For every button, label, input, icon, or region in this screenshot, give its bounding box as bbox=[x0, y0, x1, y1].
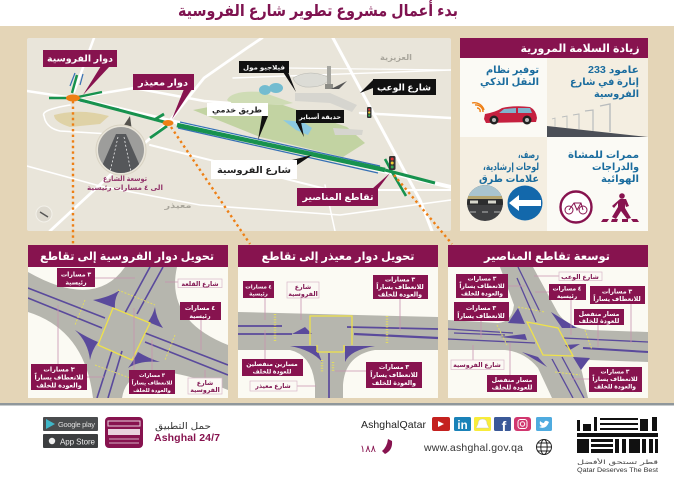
cell: pedestrian and cycle bridges bbox=[560, 150, 639, 222]
callout: 3 lanes left and U-turn: للانعطاف يساراً bbox=[592, 375, 638, 383]
label: Aspire park: حديقة أسباير bbox=[298, 113, 341, 121]
panel: convert Furousiya roundabout bbox=[28, 245, 228, 398]
callout: 3 lanes left and U-turn: ٣ مسارات bbox=[601, 368, 630, 376]
label: Villaggio Mall bbox=[239, 61, 296, 92]
callout: 4 main lanes: رئيسية bbox=[249, 292, 268, 298]
callout: 4 main lanes: رئيسية bbox=[189, 313, 211, 320]
cell: lighting poles: الفروسية bbox=[594, 89, 639, 100]
callout: 3 lanes left and U-turn: ٣ مسارات bbox=[139, 373, 166, 379]
callout: separate U-turn lane: مسار منفصل bbox=[579, 311, 620, 318]
badge: Google Play: Google play bbox=[58, 420, 95, 429]
label: service road bbox=[207, 103, 268, 140]
inset: widening bbox=[87, 116, 163, 192]
callout: 4 main lanes: ٤ مسارات bbox=[245, 284, 272, 290]
icon: wifi bbox=[472, 103, 484, 112]
callout: Qalaa street: شارع القلعة bbox=[181, 281, 219, 288]
cell: pavement, signs, markings: لوحات إرشادية، bbox=[483, 162, 539, 173]
download app text: Ashghal 24/7 bbox=[154, 432, 220, 444]
cell: pavement, signs, markings: رصف، bbox=[518, 150, 539, 161]
heading: تحويل دوار الفروسية إلى تقاطع bbox=[40, 251, 214, 264]
callout: 3 main lanes bbox=[57, 268, 95, 287]
callout: Furousiya street bbox=[188, 378, 222, 394]
icon: globe bbox=[536, 440, 552, 454]
callout: 4 main lanes: ٤ مسارات bbox=[553, 286, 582, 292]
leader lines bbox=[473, 276, 631, 379]
heading: توسعة تقاطع المناصير bbox=[483, 251, 610, 264]
label: Al Furousiya street bbox=[211, 155, 312, 179]
callout: separate U-turn lane: للعودة للخلف bbox=[579, 318, 619, 325]
badge: Google Play bbox=[43, 417, 98, 431]
callout: 3 lanes left and U-turn: للانعطاف يساراً bbox=[370, 370, 418, 379]
download app text: حمل التطبيق bbox=[155, 421, 211, 431]
label: service road: طريق خدمي bbox=[212, 106, 262, 114]
callout: 4 main lanes bbox=[243, 281, 274, 298]
callout: separate U-turn lane bbox=[574, 309, 624, 325]
callout: Furousiya street: شارع bbox=[295, 284, 311, 291]
icon: phone bbox=[382, 439, 392, 454]
callout: 3 lanes left and U-turn: ٣ مسارات bbox=[385, 276, 415, 284]
callout: Furousiya street: الفروسية bbox=[288, 291, 318, 298]
callout: 4 main lanes bbox=[549, 284, 586, 300]
heading: تحويل دوار معيذر إلى تقاطع bbox=[262, 251, 414, 264]
callout: separate U-turn lane bbox=[487, 375, 537, 392]
label: Villaggio Mall: فيلاجيو مول bbox=[243, 64, 285, 72]
cell: smart transport: توفير نظام bbox=[486, 65, 539, 76]
label: Aspire park bbox=[296, 110, 344, 137]
cell: smart transport: النقل الذكي bbox=[480, 77, 539, 88]
cell: pavement, signs, markings: علامات طرق bbox=[479, 174, 539, 185]
callout: two separate lanes bbox=[242, 359, 303, 376]
logo tagline: Qatar Deserves The Best bbox=[577, 467, 658, 474]
label: Al Manaseer intersection: تقاطع المناصير bbox=[301, 192, 374, 203]
intersection drawing bbox=[28, 267, 228, 398]
callout: Al Waab street bbox=[559, 272, 602, 281]
social icons: f bbox=[502, 418, 507, 434]
callout: 3 lanes left: للانعطاف يساراً bbox=[457, 311, 505, 320]
cell: pavement, signs, markings bbox=[465, 150, 542, 221]
footer bbox=[43, 417, 658, 474]
title: بدء أعمال مشروع تطوير شارع الفروسية bbox=[178, 0, 458, 20]
roundabout markers bbox=[66, 94, 174, 126]
Al Furousiya street line in green bbox=[49, 73, 435, 196]
panel: convert Muaither roundabout bbox=[238, 245, 438, 398]
callout: Furousiya street: شارع bbox=[197, 380, 213, 387]
logo tagline bbox=[577, 458, 658, 474]
callout: two separate lanes: للعودة للخلف bbox=[253, 368, 291, 376]
label: Muaither roundabout: دوار معيذر bbox=[137, 78, 188, 88]
callout: 3 lanes left and U-turn: للانعطاف يساراً bbox=[131, 378, 172, 386]
icon: Ashghal app bbox=[105, 417, 143, 448]
callout: Al Waab street: شارع الوعب bbox=[561, 274, 599, 281]
callout: 3 lanes left and U-turn: والعودة للخلف bbox=[378, 292, 422, 298]
place name: Al Aziziyah: العزيزية bbox=[380, 53, 412, 62]
callout: two separate lanes: مسارين منفصلين bbox=[246, 361, 298, 368]
social handle: AshghalQatar bbox=[361, 419, 426, 431]
cell: pedestrian and cycle bridges: الهوائية bbox=[601, 174, 639, 185]
website: www.ashghal.gov.qa bbox=[423, 442, 523, 454]
badge: App Store: App Store bbox=[60, 438, 96, 446]
callout: 3 lanes left and U-turn: والعودة للخلف bbox=[133, 388, 171, 394]
callout: 3 lanes left and U-turn: والعودة للخلف bbox=[36, 382, 82, 390]
cell: pedestrian and cycle bridges: ممرات للمشاة bbox=[568, 150, 639, 161]
callout: 3 lanes left and U-turn bbox=[456, 274, 508, 298]
callout: Furousiya street bbox=[287, 282, 319, 298]
download app text bbox=[154, 421, 220, 444]
callout: 3 lanes left and U-turn bbox=[129, 370, 175, 394]
callout: 3 lanes left and U-turn: والعودة للخلف bbox=[461, 290, 503, 298]
callout: 3 lanes left and U-turn bbox=[366, 362, 422, 388]
label: Muaither roundabout bbox=[133, 74, 194, 119]
panel: traffic safety bbox=[460, 38, 648, 231]
dotted connector lines bbox=[73, 101, 452, 245]
callout: 3 lanes left: للانعطاف يساراً bbox=[593, 294, 641, 303]
label: Al Furousiya street: شارع الفروسية bbox=[217, 165, 291, 176]
label: Al Manaseer intersection bbox=[297, 173, 390, 206]
callout: 3 lanes left and U-turn bbox=[589, 367, 642, 392]
icon: pedestrian crossing bbox=[601, 193, 639, 222]
heading: traffic safety: زيادة السلامة المرورية bbox=[520, 43, 640, 55]
callout: 3 lanes left and U-turn: ٣ مسارات bbox=[379, 364, 409, 371]
map base roads and parks bbox=[27, 38, 451, 231]
heading: traffic safety bbox=[460, 38, 648, 58]
panel: location map bbox=[27, 38, 452, 245]
callout: Muaither street: شارع معيذر bbox=[254, 383, 291, 390]
callout: 3 main lanes: ٣ مسارات bbox=[61, 272, 91, 278]
icon: small traffic light bbox=[367, 107, 372, 118]
hotline number: ١٨٨ bbox=[360, 444, 377, 455]
cell: smart transport bbox=[472, 65, 539, 124]
logo tagline: قطر تستحق الأفضل bbox=[577, 458, 658, 466]
intersection drawing bbox=[238, 312, 438, 398]
panel: widen Al Manaseer intersection bbox=[448, 245, 648, 398]
callout: separate U-turn lane: مسار منفصل bbox=[492, 377, 533, 384]
label: Al Waab street bbox=[360, 79, 436, 95]
cell: lighting poles: إنارة في شارع bbox=[570, 77, 639, 88]
callout: 3 lanes left and U-turn bbox=[31, 364, 87, 390]
callout: Qalaa street bbox=[178, 279, 222, 288]
callout: 3 lanes left and U-turn: للانعطاف يساراً bbox=[34, 372, 84, 382]
callout: 4 main lanes: رئيسية bbox=[557, 294, 578, 300]
callout: 3 lanes left and U-turn: للانعطاف يساراً bbox=[459, 282, 505, 290]
icon: road surface bbox=[465, 185, 505, 221]
callout: 3 lanes left and U-turn: والعودة للخلف bbox=[372, 380, 416, 387]
cell: pedestrian and cycle bridges: والدراجات bbox=[592, 162, 639, 173]
callout: separate U-turn lane: للعودة للخلف bbox=[492, 384, 532, 392]
callout: 3 lanes left bbox=[590, 286, 645, 304]
place name: Muaither: معيذر bbox=[163, 201, 192, 210]
callout: Furousiya street: الفروسية bbox=[190, 387, 220, 394]
callout: Furousiya street: شارع الفروسية bbox=[453, 362, 501, 369]
label: Al Waab street: شارع الوعب bbox=[377, 82, 431, 94]
badge: App Store bbox=[43, 434, 98, 448]
social icons bbox=[432, 417, 552, 434]
callout: 3 lanes left bbox=[454, 302, 509, 321]
compass bbox=[36, 206, 52, 222]
callout: 4 main lanes: ٤ مسارات bbox=[185, 305, 215, 312]
social icons: in bbox=[457, 420, 468, 432]
icon: bicycle sign bbox=[560, 192, 592, 222]
callout: 3 lanes left and U-turn: ٣ مسارات bbox=[43, 366, 75, 374]
label: Furousiya roundabout bbox=[43, 50, 117, 95]
callout: 3 lanes left and U-turn bbox=[373, 275, 428, 299]
inset: widening: توسعة الشارع bbox=[103, 176, 147, 183]
callout: 3 main lanes: رئيسية bbox=[65, 280, 87, 286]
heading bbox=[238, 245, 438, 267]
leader lines bbox=[265, 298, 400, 386]
icon: large traffic light bbox=[389, 156, 396, 170]
callout: 3 lanes left and U-turn: للانعطاف يساراً bbox=[376, 282, 424, 291]
callout: 4 main lanes bbox=[180, 302, 221, 320]
logo: Ashghal bbox=[577, 417, 658, 453]
icon: car bbox=[484, 106, 537, 124]
icon: direction arrow sign bbox=[508, 186, 542, 220]
heading bbox=[448, 245, 648, 267]
intersection drawing bbox=[448, 267, 648, 398]
heading bbox=[28, 245, 228, 267]
cell: lighting poles bbox=[547, 65, 648, 137]
callout: Muaither street bbox=[250, 381, 297, 391]
leader lines bbox=[58, 278, 205, 378]
callout: 3 lanes left and U-turn: والعودة للخلف bbox=[594, 384, 636, 390]
callout: 3 lanes left and U-turn: ٣ مسارات bbox=[468, 276, 497, 282]
cell: lighting poles: عامود 233 bbox=[588, 65, 639, 76]
label: Furousiya roundabout: دوار الفروسية bbox=[47, 54, 113, 64]
callout: 3 lanes left: ٣ مسارات bbox=[466, 305, 496, 312]
inset: widening: الى ٤ مسارات رئيسية bbox=[87, 185, 163, 192]
callout: 3 lanes left: ٣ مسارات bbox=[602, 288, 632, 296]
callout: Furousiya street bbox=[451, 360, 504, 370]
